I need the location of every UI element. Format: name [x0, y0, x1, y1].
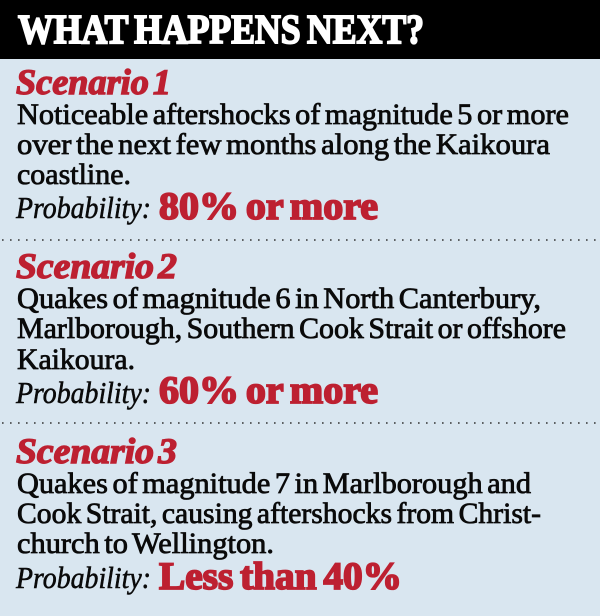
scenario 1 probability: Probability: — [15, 190, 151, 225]
scenario 3 heading: Scenario 3 — [16, 431, 177, 471]
scenario 2 description — [17, 282, 566, 376]
scenario 1 heading: Scenario 1 — [16, 62, 171, 102]
scenario 2 heading: Scenario 2 — [16, 246, 177, 286]
scenario 2 description: Kaikoura. — [17, 343, 135, 376]
scenario 1 description — [17, 98, 569, 191]
scenario 2 probability: 60% or more — [159, 369, 378, 412]
scenario 3 probability: Less than 40% — [159, 555, 402, 598]
panel: scenario 2 — [15, 246, 566, 412]
scenario 3 description: Cook Strait, causing aftershocks from Christ- — [17, 497, 541, 530]
scenario 3 probability — [15, 555, 402, 598]
scenario 1 probability — [15, 185, 378, 228]
scenario 3 description — [17, 467, 541, 560]
scenario 3 probability: Probability: — [15, 560, 151, 595]
scenario 1 description: Noticeable aftershocks of magnitude 5 or more — [17, 98, 569, 131]
scenario 1 description: over the next few months along the Kaikoura — [17, 128, 550, 161]
scenario 1 probability: 80% or more — [159, 185, 378, 228]
title: WHAT HAPPENS NEXT? — [18, 6, 424, 52]
scenario 2 description: Marlborough, Southern Cook Strait or offshore — [17, 312, 566, 345]
scenario 3 description: church to Wellington. — [17, 527, 274, 560]
scenario 3 description: Quakes of magnitude 7 in Marlborough and — [17, 467, 531, 500]
panel: scenario 3 — [15, 431, 541, 598]
scenario 2 probability: Probability: — [15, 375, 151, 410]
scenario 2 description: Quakes of magnitude 6 in North Canterbury, — [17, 282, 541, 315]
header band — [0, 0, 600, 59]
scenario 2 probability — [15, 369, 378, 412]
scenario 1 description: coastline. — [17, 158, 131, 191]
panel: scenario 1 — [15, 62, 569, 228]
